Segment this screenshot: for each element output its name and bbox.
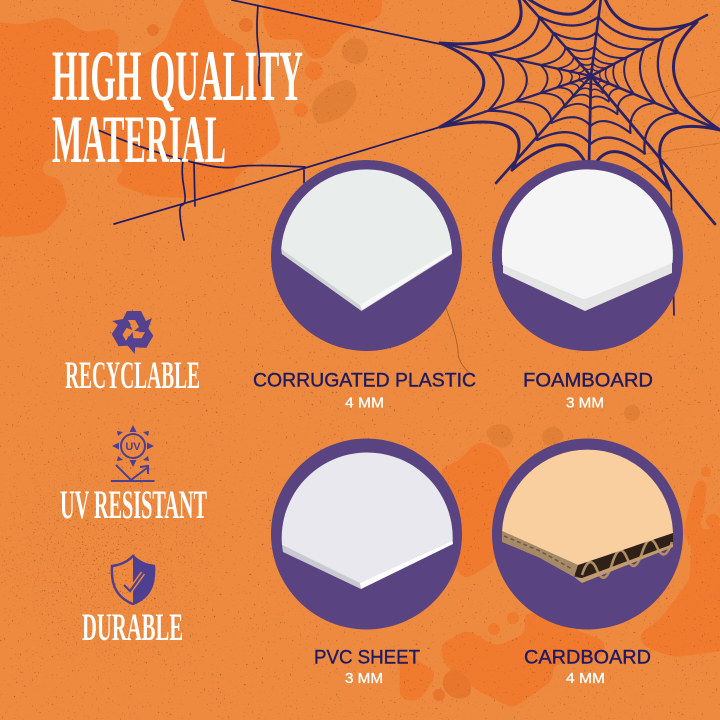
web strand over title (257, 5, 260, 86)
label: pvc sheet (314, 648, 420, 687)
spider web lines (98, 0, 440, 240)
panel: corrugated plastic (271, 160, 462, 351)
label: cardboard: CARDBOARD (524, 648, 651, 668)
label: cardboard (524, 648, 651, 687)
title (52, 36, 303, 177)
label: foamboard: FOAMBOARD (523, 370, 653, 392)
label: corrugated plastic (253, 370, 476, 412)
icon: uv sun: UV (125, 441, 141, 453)
panel: cardboard (492, 438, 683, 630)
text: RECYCLABLE (65, 354, 200, 397)
label: pvc sheet: 3 MM (345, 670, 383, 687)
label: foamboard (523, 370, 653, 412)
label: cardboard: 4 MM (566, 670, 605, 687)
panel: foamboard (492, 160, 683, 351)
label: corrugated plastic: CORRUGATED PLASTIC (253, 370, 476, 392)
label: durable: DURABLE (82, 606, 183, 649)
icon: uv sun (111, 425, 154, 481)
text: HIGH QUALITY (52, 36, 303, 116)
label: pvc sheet: PVC SHEET (314, 648, 420, 668)
label: uv resistant: UV RESISTANT (60, 482, 207, 527)
title: MATERIAL (52, 101, 226, 177)
icon: shield (112, 556, 154, 604)
icon: recycle (106, 311, 157, 357)
panel: pvc sheet (271, 438, 462, 630)
label: foamboard: 3 MM (566, 394, 604, 412)
label: corrugated plastic: 4 MM (345, 394, 384, 412)
spider web (289, 0, 720, 315)
